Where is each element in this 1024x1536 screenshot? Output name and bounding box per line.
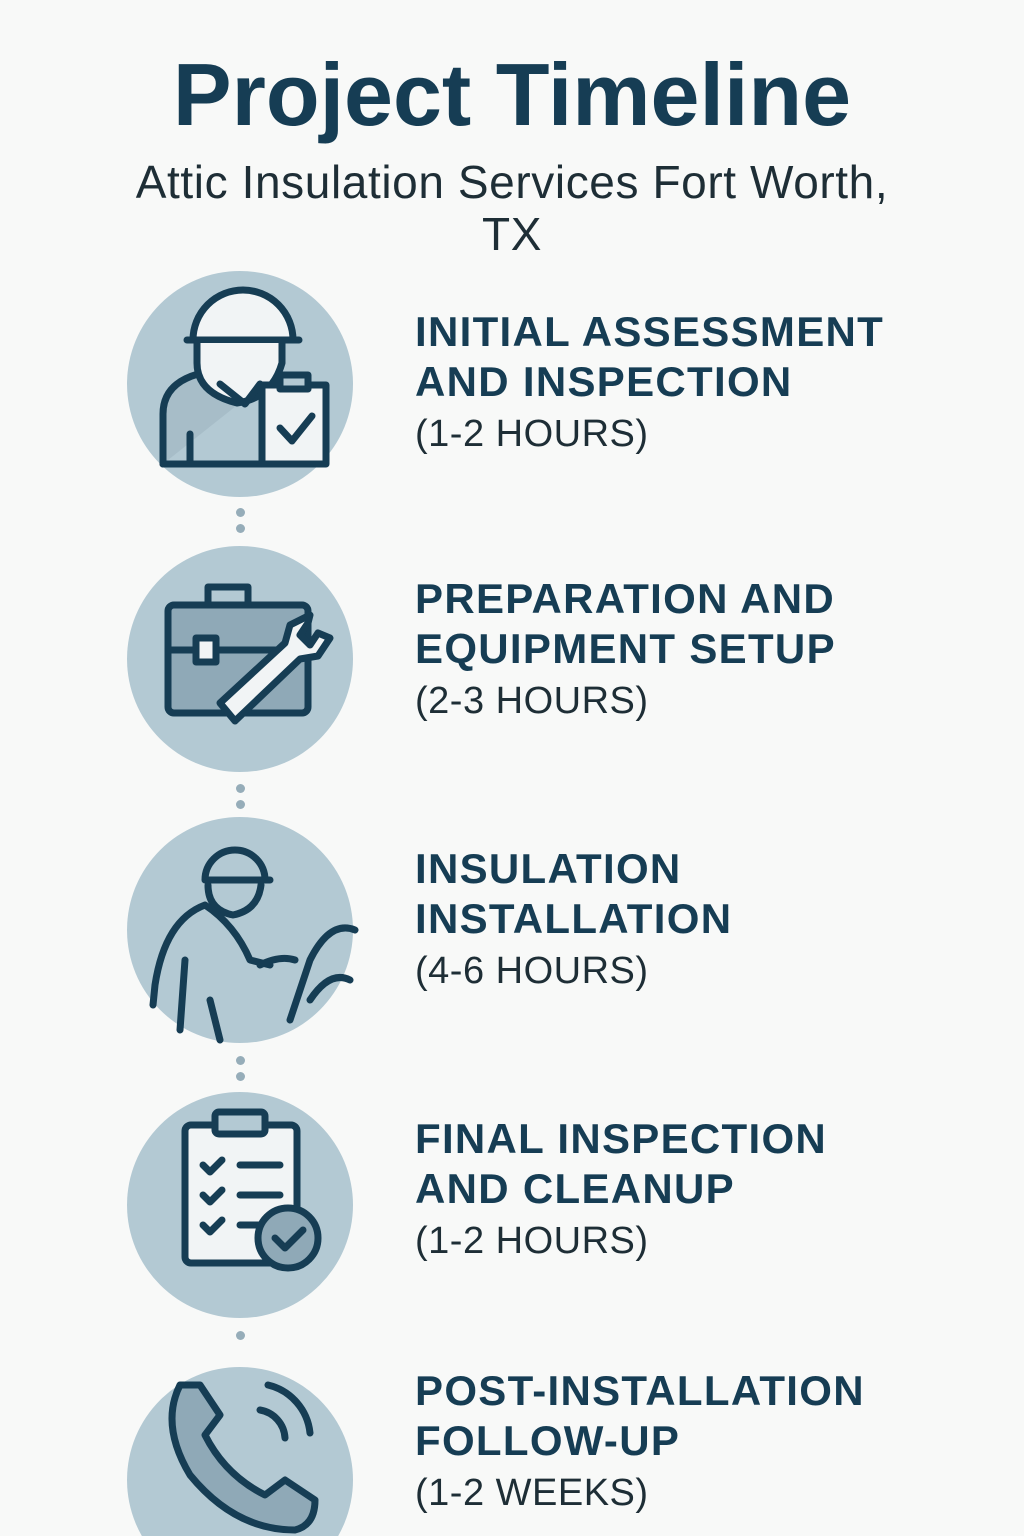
subtitle: TX xyxy=(482,208,542,260)
step 3 text: INSULATION xyxy=(415,845,682,892)
step 2 text xyxy=(415,575,836,722)
step 5 text: FOLLOW-UP xyxy=(415,1417,680,1464)
icon: worker installing insulation xyxy=(127,817,355,1043)
step 4 text: FINAL INSPECTION xyxy=(415,1115,827,1162)
step 4 text xyxy=(415,1115,827,1262)
subtitle xyxy=(136,156,888,260)
step 3 text: (4-6 HOURS) xyxy=(415,950,649,992)
step 1 text: AND INSPECTION xyxy=(415,358,793,405)
step 1 text xyxy=(415,308,884,455)
step 1 text: INITIAL ASSESSMENT xyxy=(415,308,884,355)
icon: toolbox and wrench xyxy=(127,546,353,772)
step 5 text xyxy=(415,1367,865,1514)
step 5 text: (1-2 WEEKS) xyxy=(415,1472,649,1514)
icon: inspector with clipboard xyxy=(127,271,353,497)
subtitle: Attic Insulation Services Fort Worth, xyxy=(136,156,888,208)
step 4 text: AND CLEANUP xyxy=(415,1165,735,1212)
step 3 text xyxy=(415,845,732,992)
icon: phone xyxy=(127,1367,353,1536)
step 2 text: (2-3 HOURS) xyxy=(415,680,649,722)
step 2 text: EQUIPMENT SETUP xyxy=(415,625,836,672)
step 2 text: PREPARATION AND xyxy=(415,575,835,622)
step 1 text: (1-2 HOURS) xyxy=(415,413,649,455)
step 3 text: INSTALLATION xyxy=(415,895,732,942)
connector dots xyxy=(236,508,245,1340)
step 4 text: (1-2 HOURS) xyxy=(415,1220,649,1262)
step 5 text: POST-INSTALLATION xyxy=(415,1367,865,1414)
icon: checklist xyxy=(127,1092,353,1318)
title: Project Timeline xyxy=(173,45,851,144)
